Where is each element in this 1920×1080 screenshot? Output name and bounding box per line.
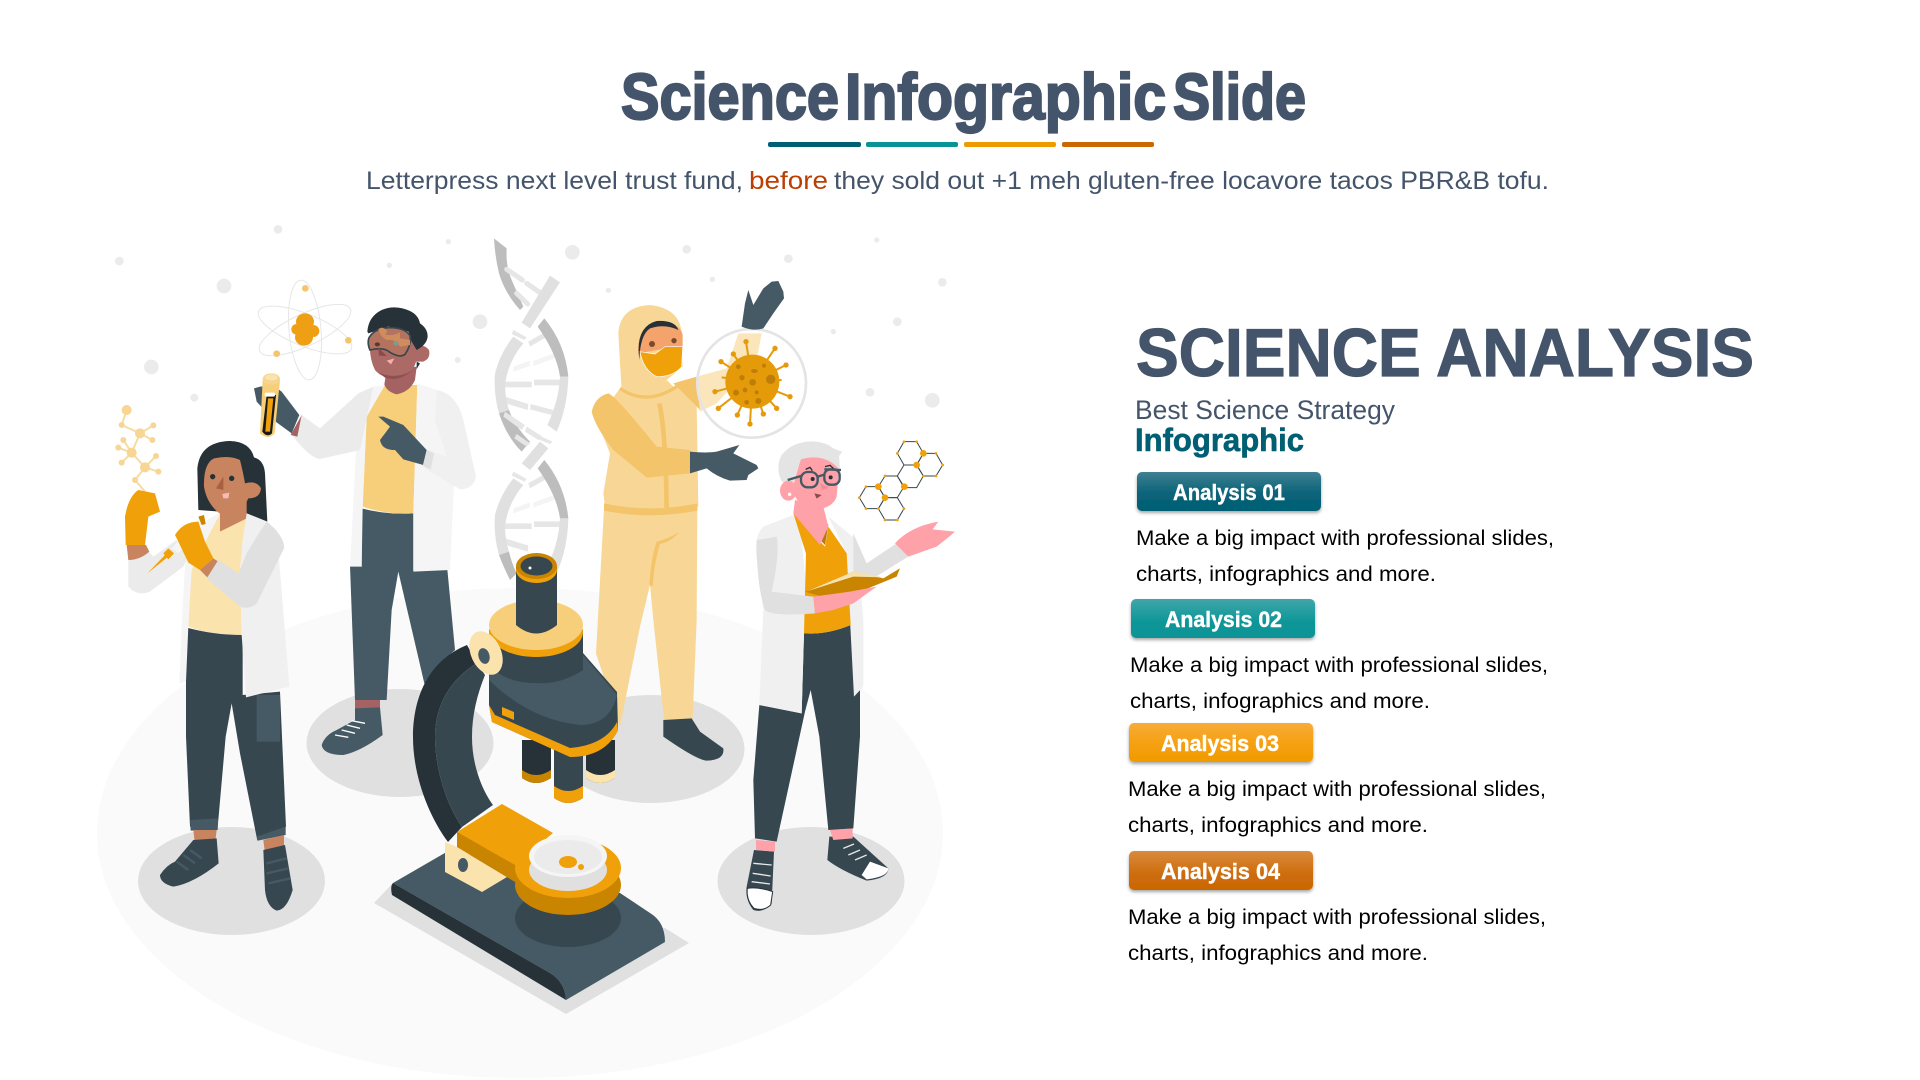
stage column [515, 889, 621, 947]
older scientist head [778, 441, 842, 509]
man head with goggles [367, 307, 429, 394]
glasses [788, 469, 841, 487]
pale block [445, 842, 507, 892]
base shadow [374, 883, 689, 1014]
hair [367, 307, 428, 350]
neck band [489, 630, 583, 683]
description [1136, 527, 1554, 586]
orange shirt [793, 513, 851, 634]
DNA helix [494, 238, 568, 580]
socks [756, 828, 853, 852]
scientist 4: older scientist with book [746, 500, 955, 911]
subtitle [366, 167, 1549, 195]
description [1128, 906, 1546, 965]
scientist 2: man with test tube [254, 373, 476, 755]
mask [640, 347, 683, 377]
gloves [125, 490, 160, 545]
description: Make a big impact with professional slides, [1136, 527, 1554, 550]
subtitle: Letterpress next level trust fund, [366, 167, 743, 195]
objective legs [522, 740, 551, 783]
subtitle: before [749, 167, 828, 195]
base side [391, 883, 566, 1000]
subheading: best science strategy: Best Science Strategy [1135, 395, 1395, 425]
ankles [193, 830, 284, 853]
illustration: scientists with microscope [97, 225, 955, 1078]
title: Infographic [845, 60, 1166, 133]
petri dish [529, 849, 607, 891]
lower glove [690, 445, 758, 481]
scientist 1: woman with pipette [125, 441, 293, 911]
title [621, 60, 1306, 133]
back hair [197, 441, 267, 522]
virus icon [712, 339, 793, 427]
shoes [160, 838, 219, 887]
face [370, 335, 429, 377]
face [638, 322, 683, 353]
nose and mouth [378, 348, 387, 356]
badge: analysis 02 [1131, 599, 1315, 638]
panel: analysis 01 [1136, 472, 1554, 586]
ear [780, 481, 797, 501]
raised glove [742, 281, 784, 330]
face [793, 457, 839, 509]
title: Slide [1173, 60, 1306, 133]
badge: analysis 01: Analysis 01 [1173, 480, 1285, 505]
floor shadows [138, 689, 904, 935]
pale shirt [188, 513, 247, 635]
base top [393, 850, 665, 1000]
molecule icon [115, 405, 161, 492]
badge: analysis 03 [1129, 723, 1313, 762]
arm [413, 645, 477, 842]
suit trousers [596, 507, 697, 727]
top strand [494, 238, 523, 310]
body [489, 653, 618, 757]
face and neck [204, 457, 261, 532]
goggles [368, 328, 410, 356]
title underline: four colour bars [768, 142, 1154, 147]
hood [618, 305, 683, 397]
ground ellipse [97, 588, 943, 1078]
microscope [374, 553, 689, 1014]
sleeves [757, 537, 815, 614]
stage [515, 855, 621, 915]
stage arm [457, 832, 540, 882]
lens ring [697, 329, 806, 438]
neck [384, 367, 417, 394]
raised sleeve [293, 387, 373, 459]
subtitle: they sold out +1 meh gluten-free locavore tacos PBR&B tofu. [834, 167, 1549, 195]
lab coat [756, 515, 807, 713]
pipette [172, 518, 206, 553]
bent sleeve [425, 390, 476, 489]
description: Make a big impact with professional slides, [1128, 778, 1546, 801]
hands [813, 587, 877, 613]
shoes [746, 850, 774, 911]
subheading: infographic: Infographic [1135, 422, 1304, 458]
right arm sleeve [207, 522, 284, 608]
description [1128, 778, 1546, 837]
arm behind lens [673, 377, 702, 412]
description: Make a big impact with professional slides, [1128, 906, 1546, 929]
shoe [322, 707, 383, 755]
boot [663, 718, 723, 761]
panel: analysis 04 [1128, 851, 1546, 965]
badge: analysis 02: Analysis 02 [1165, 607, 1282, 632]
scientist 3: hazmat suit [592, 281, 806, 761]
left arm sleeve [128, 540, 188, 593]
badge: analysis 04 [1129, 851, 1313, 890]
neck [793, 500, 828, 545]
eyepiece tube [516, 567, 557, 634]
heading: science analysis: SCIENCE ANALYSIS [1136, 315, 1754, 391]
focus knob [463, 626, 509, 680]
badge: analysis 01 [1137, 472, 1321, 511]
open book [805, 568, 900, 596]
description: charts, infographics and more. [1128, 814, 1428, 837]
atom icon [253, 279, 357, 381]
raised glove [254, 386, 299, 433]
description: Make a big impact with professional slides, [1130, 654, 1548, 677]
lab coat [179, 513, 220, 683]
background particles [115, 225, 947, 408]
trousers [350, 508, 455, 700]
panel: analysis 02 [1130, 599, 1548, 713]
badge: analysis 03: Analysis 03 [1161, 731, 1279, 756]
trousers [186, 627, 286, 841]
torso [597, 387, 698, 512]
description: charts, infographics and more. [1128, 942, 1428, 965]
lab coat [350, 385, 385, 567]
collar disc [489, 607, 583, 657]
helix segment 2 [495, 460, 568, 580]
yellow shirt [363, 385, 417, 514]
panel: analysis 03 [1128, 723, 1546, 837]
description: charts, infographics and more. [1136, 563, 1436, 586]
hexagon molecule icon [858, 440, 944, 521]
test tube [260, 380, 280, 437]
trousers [753, 625, 860, 842]
badge: analysis 04: Analysis 04 [1161, 859, 1281, 884]
description: charts, infographics and more. [1130, 690, 1430, 713]
pointing glove [378, 417, 427, 465]
helix segment 1 [495, 318, 568, 470]
title: Science [621, 60, 839, 133]
suit sleeve [592, 393, 690, 478]
description [1130, 654, 1548, 713]
hair [778, 441, 842, 483]
